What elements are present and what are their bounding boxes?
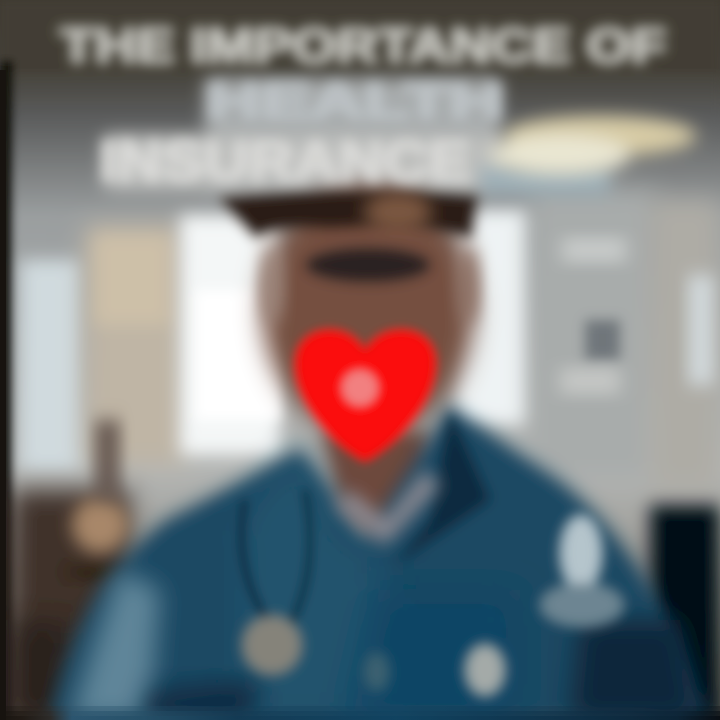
badge icon: medical cross emblem — [540, 515, 624, 627]
left edge: dark door frame — [0, 70, 6, 720]
stethoscope — [242, 490, 310, 675]
title: HEALTH — [207, 76, 503, 129]
person: neck and face — [220, 185, 480, 545]
shirt button icon — [364, 644, 505, 696]
title: THE IMPORTANCE OF — [60, 20, 666, 73]
title: INSURANCE — [100, 129, 470, 192]
heart icon — [295, 329, 436, 462]
title backdrop: pale mass behind the heading — [105, 78, 610, 195]
person: blue shirt — [50, 405, 705, 720]
ceiling light — [490, 116, 696, 175]
title — [60, 20, 666, 192]
bottom edge: shirt and floor continuing to the frame — [0, 706, 720, 720]
